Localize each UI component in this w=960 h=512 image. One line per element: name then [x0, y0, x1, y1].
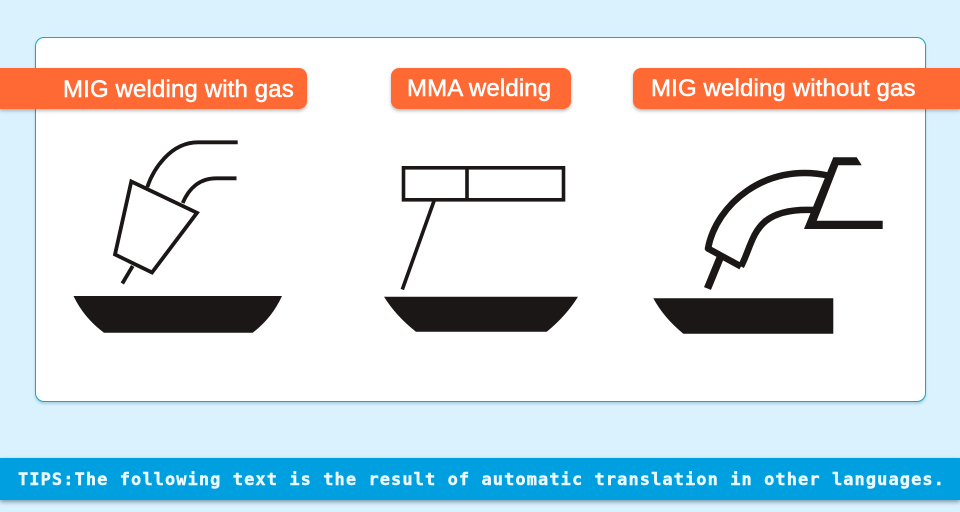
- icon: MIG torch without gas: [653, 157, 883, 334]
- label: MIG welding without gas: MIG welding without gas: [651, 75, 916, 102]
- panel: welding types: [35, 37, 926, 402]
- label: MIG welding with gas: MIG welding with gas: [63, 76, 294, 103]
- label: MIG welding with gas: [0, 68, 307, 109]
- tips banner: [0, 458, 960, 500]
- icon: MMA electrode holder: [384, 168, 578, 332]
- label: MMA welding: [391, 68, 571, 109]
- label: MMA welding: MMA welding: [407, 75, 551, 102]
- label: MIG welding without gas: [633, 68, 960, 109]
- tips text: TIPS:The following text is the result of automatic translation in other languages.: [18, 470, 945, 490]
- icon: MIG torch with gas: [74, 142, 282, 333]
